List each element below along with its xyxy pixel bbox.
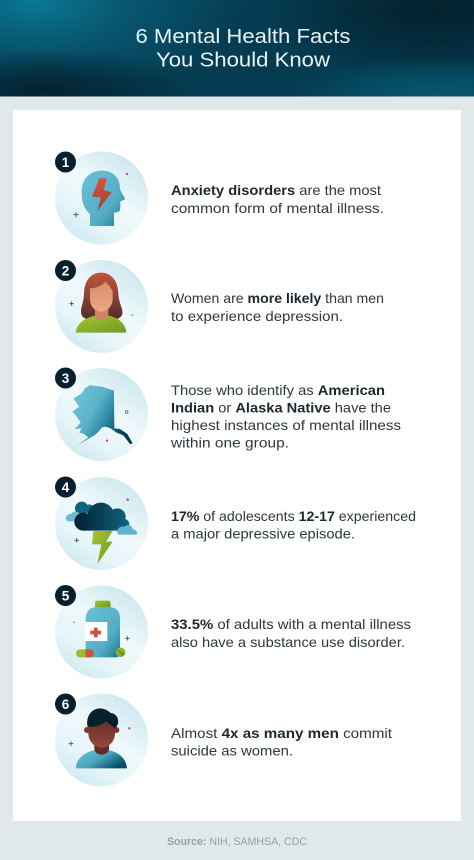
number badge 2 <box>55 260 76 281</box>
text: fact 4 <box>171 508 416 542</box>
text: fact 2 <box>171 290 384 324</box>
title: You Should Know <box>156 48 330 72</box>
text: fact 4: a major depressive episode. <box>171 526 355 542</box>
number badge 6 <box>55 694 76 714</box>
number badge 6: 6 <box>62 697 70 712</box>
white content panel <box>13 110 461 821</box>
text: fact 6: suicide as women. <box>171 742 293 758</box>
number badge 2: 2 <box>62 263 69 278</box>
text: fact 4: 17% of adolescents 12-17 experienced <box>171 508 416 524</box>
number badge 3: 3 <box>62 371 70 386</box>
text: fact 3: Indian or Alaska Native have the <box>171 400 391 416</box>
text: fact 5: also have a substance use disorder. <box>171 634 405 650</box>
number badge 3 <box>55 368 76 388</box>
number badge 4: 4 <box>62 480 70 495</box>
number badge 5: 5 <box>62 588 70 603</box>
icon: head with lightning bolt <box>55 152 148 244</box>
fact 3: American Indian or Alaska Native <box>55 368 401 461</box>
icon: map of Alaska <box>55 368 148 461</box>
fact 6: men and suicide <box>55 694 392 786</box>
text: fact 1: Anxiety disorders are the most <box>171 182 381 198</box>
fact 1: anxiety disorders <box>55 152 384 244</box>
text: fact 2: to experience depression. <box>171 308 343 324</box>
fact 2: women and depression <box>55 260 384 353</box>
icon: storm cloud with lightning <box>55 477 148 570</box>
text: fact 3: Those who identify as American <box>171 382 385 398</box>
number badge 1: 1 <box>62 155 70 170</box>
source line: Source: NIH, SAMHSA, CDC <box>167 836 307 848</box>
text: fact 2: Women are more likely than men <box>171 290 384 306</box>
text: fact 3 <box>170 382 401 450</box>
text: fact 3: within one group. <box>170 434 289 450</box>
icon: woman <box>55 260 148 353</box>
title <box>136 25 350 72</box>
text: fact 1: common form of mental illness. <box>171 200 384 216</box>
number badge 5 <box>55 585 76 606</box>
header banner <box>0 0 474 96</box>
text: fact 6: Almost 4x as many men commit <box>171 725 392 741</box>
number badge 4 <box>55 476 76 498</box>
icon: man <box>55 694 148 786</box>
icon: medicine bottle and pills <box>55 586 148 678</box>
fact 4: adolescents <box>55 476 416 570</box>
number badge 1 <box>55 152 76 172</box>
text: fact 1 <box>171 182 384 216</box>
text: fact 6 <box>171 725 392 758</box>
fact 5: substance use <box>55 585 411 678</box>
title: 6 Mental Health Facts <box>136 25 350 48</box>
text: fact 5 <box>171 616 411 650</box>
text: fact 5: 33.5% of adults with a mental illness <box>171 616 411 632</box>
text: fact 3: highest instances of mental illness <box>171 417 401 433</box>
